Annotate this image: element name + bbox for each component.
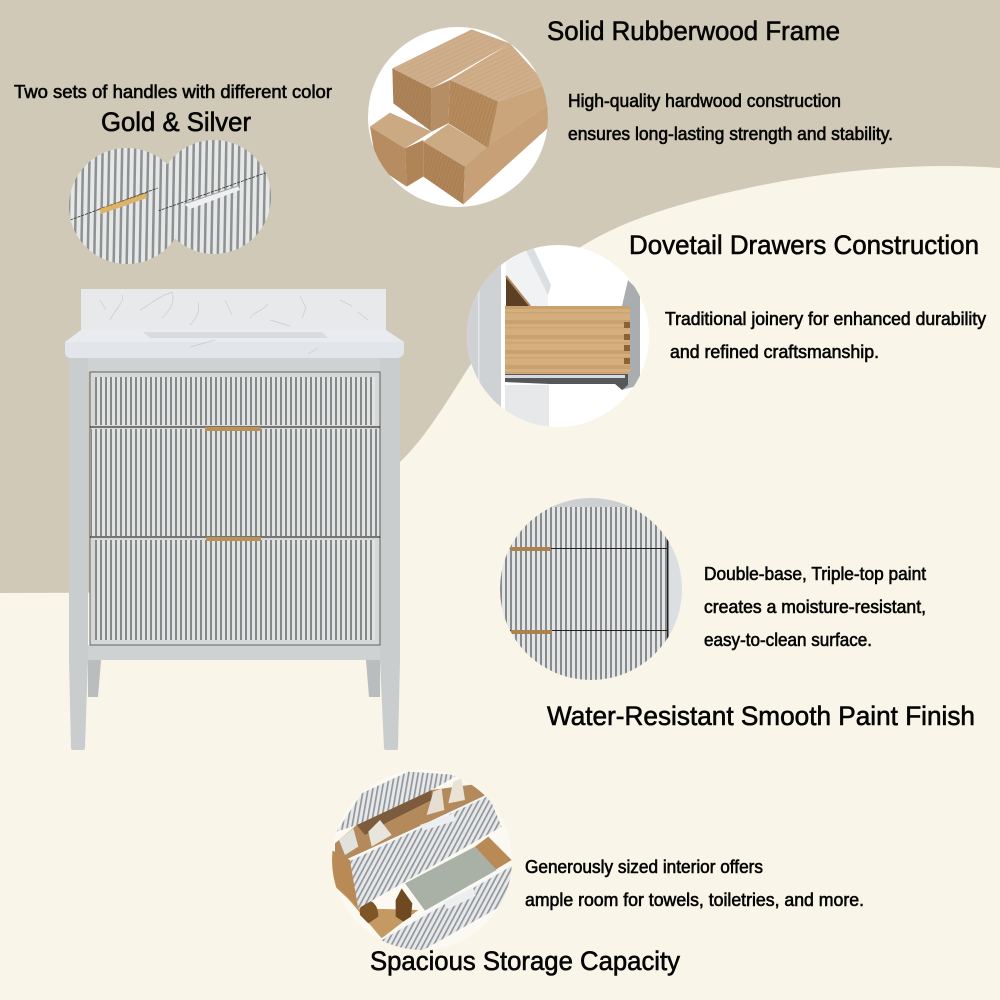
feature text: rubberwood frame: Solid Rubberwood Frame: [547, 16, 840, 46]
frame rails: [88, 358, 380, 660]
feature text: paint finish: creates a moisture-resistant,: [704, 597, 926, 617]
icon: wood blocks: [370, 29, 550, 204]
paint finish circle: [500, 498, 682, 680]
heading: handles: Gold & Silver: [101, 107, 251, 137]
feature text: storage: [370, 857, 864, 976]
wood circle: [368, 27, 548, 207]
back legs: [88, 660, 380, 697]
dovetail drawer circle: [467, 245, 649, 427]
gold handle circle: [69, 148, 175, 264]
front legs and posts: [69, 358, 400, 750]
silver handle circle: [158, 140, 271, 254]
feature text: paint finish: easy-to-clean surface.: [704, 630, 872, 650]
toiletry bottles: [339, 778, 465, 923]
middle drawer: [90, 427, 380, 537]
lower drawer interior: [475, 837, 512, 870]
bottom drawer: [90, 537, 380, 645]
icon: open drawer: [465, 240, 640, 430]
marble countertop: [65, 289, 404, 358]
feature text: paint finish: Double-base, Triple-top paint: [704, 564, 926, 584]
feature text: dovetail drawers: Dovetail Drawers Construction: [629, 230, 979, 260]
feature text: dovetail drawers: and refined craftsmanship.: [670, 342, 879, 362]
icon: open storage drawers: [332, 772, 512, 957]
feature text: rubberwood frame: ensures long-lasting strength and stability.: [568, 124, 893, 144]
feature text: dovetail drawers: Traditional joinery for enhanced durability: [665, 309, 986, 329]
top drawer: [90, 372, 380, 427]
feature text: storage: Spacious Storage Capacity: [370, 946, 681, 976]
feature text: rubberwood frame: [547, 16, 893, 144]
storage circle: [332, 770, 512, 950]
feature text: paint finish: Water-Resistant Smooth Paint Finish: [547, 701, 975, 731]
drawer seams: [90, 427, 380, 537]
gold drawer pulls: [205, 427, 261, 541]
feature text: paint finish: [547, 564, 975, 731]
feature text: dovetail drawers: [629, 230, 986, 362]
feature text: rubberwood frame: High-quality hardwood construction: [568, 91, 841, 111]
top drawer front: [350, 795, 502, 908]
heading: handles: [14, 82, 332, 137]
taupe curved background shape: [0, 0, 1000, 593]
lower drawer front: [380, 865, 512, 957]
feature text: storage: Generously sized interior offers: [525, 857, 763, 877]
vanity cabinet: [69, 358, 400, 750]
heading: handles: Two sets of handles with different color: [14, 82, 332, 102]
feature text: storage: ample room for towels, toiletries, and more.: [525, 890, 864, 910]
